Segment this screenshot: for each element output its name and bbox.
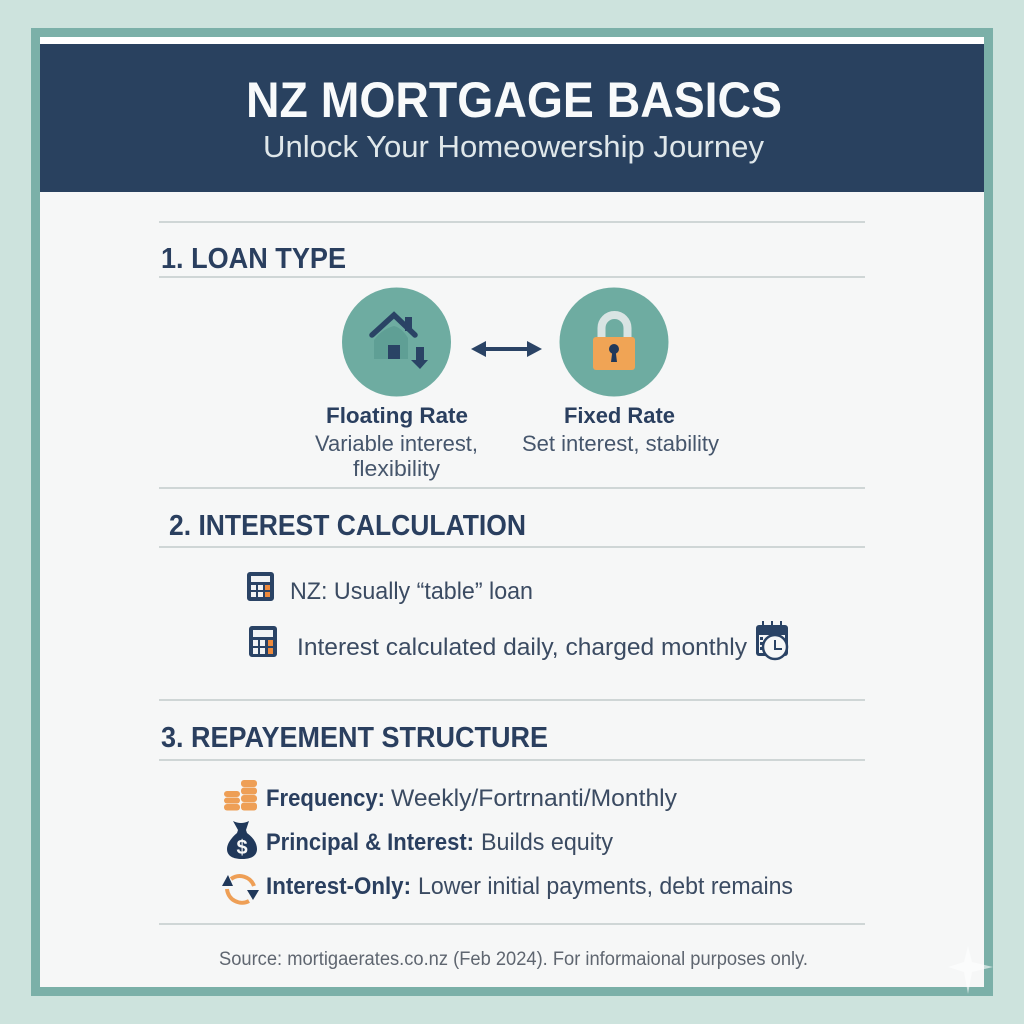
sparkle: corner watermark: [948, 946, 993, 994]
heading: loan type: 1. LOAN TYPE: [161, 243, 346, 275]
title: NZ MORTGAGE BASICS: [246, 72, 782, 128]
icon: calculator: [250, 627, 276, 656]
heading: repayment structure: 3. REPAYEMENT STRUCTURE: [161, 722, 548, 754]
subtitle: Unlock Your Homeowership Journey: [263, 129, 764, 164]
text: principal and interest: Builds equity: [481, 829, 613, 856]
text: interest only: Lower initial payments, debt remains: [418, 873, 793, 900]
text: interest only: Interest-Only:: [266, 873, 411, 900]
text: principal and interest: [266, 829, 613, 856]
text: frequency: Weekly/Fortrnanti/Monthly: [391, 785, 677, 812]
icon: calendar with clock: [756, 621, 788, 659]
icon: house with down arrow: [342, 288, 451, 396]
icon: cycle arrows: [222, 875, 259, 903]
icon: coins: [224, 780, 257, 810]
source footer: Source: mortigaerates.co.nz (Feb 2024). For informaional purposes only.: [219, 949, 808, 970]
icon: padlock: [560, 288, 668, 396]
text: frequency: Frequency:: [266, 785, 385, 812]
section 2: interest calculation: [169, 510, 788, 661]
icon: money bag: [227, 821, 257, 859]
arrow: floating versus fixed: [471, 341, 542, 357]
fixed rate text: Set interest, stability: [522, 431, 719, 456]
section 1: loan type: [161, 243, 719, 481]
floating rate text: [315, 403, 478, 481]
heading: interest calculation: 2. INTEREST CALCULATION: [169, 510, 526, 542]
header banner: [40, 44, 984, 192]
icon: money bag: $: [236, 837, 248, 859]
floating rate text: flexibility: [353, 456, 440, 481]
text: frequency: [266, 785, 677, 812]
icon: calculator: [248, 573, 273, 600]
floating rate text: Variable interest,: [315, 431, 478, 456]
fixed rate text: [522, 403, 719, 456]
text: table loan: NZ: Usually “table” loan: [290, 578, 533, 605]
fixed rate text: Fixed Rate: [564, 403, 675, 428]
text: principal and interest: Principal & Interest:: [266, 829, 474, 856]
text: interest only: [266, 873, 793, 900]
section 3: repayment structure: [161, 722, 793, 903]
floating rate text: Floating Rate: [326, 403, 468, 428]
text: interest daily: Interest calculated daily, charged monthly: [297, 634, 747, 661]
